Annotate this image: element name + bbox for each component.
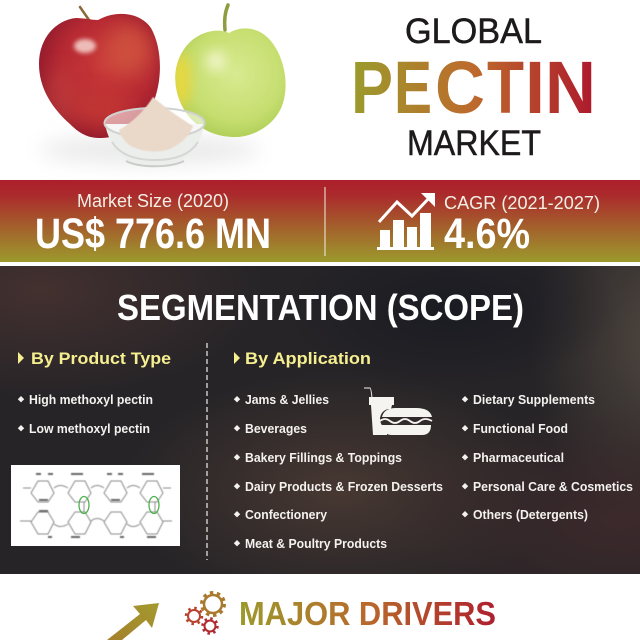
market size value: US$ 776.6 MN xyxy=(35,210,271,258)
title line: PECTIN: C xyxy=(435,46,485,129)
glass bowl with powder xyxy=(104,97,204,166)
CAGR label: CAGR (2021-2027) xyxy=(444,193,600,213)
heading: major drivers: MAJOR DRIVERS xyxy=(239,595,496,632)
icon: drink and burger xyxy=(364,388,432,435)
application list, right xyxy=(462,393,633,522)
application list, right: Pharmaceutical xyxy=(473,451,564,465)
heading: segmentation: SEGMENTATION (SCOPE) xyxy=(117,287,524,328)
application list, left: Meat & Poultry Products xyxy=(245,537,387,551)
title xyxy=(351,12,596,163)
title line: MARKET: MARKET xyxy=(407,124,541,163)
title line: PECTIN: P xyxy=(351,46,393,129)
application list, left xyxy=(234,393,443,551)
band divider xyxy=(324,187,326,256)
CAGR value: 4.6% xyxy=(444,210,530,258)
title line: PECTIN: T xyxy=(487,46,524,129)
column: by application xyxy=(234,349,633,551)
title line: GLOBAL: GLOBAL xyxy=(405,12,542,51)
stats band xyxy=(0,180,640,262)
product type list: Low methoxyl pectin xyxy=(29,422,150,436)
market size label: Market Size (2020) xyxy=(77,191,229,211)
application list, right: Functional Food xyxy=(473,422,568,436)
title line: PECTIN: N xyxy=(545,46,596,129)
application list, right: Dietary Supplements xyxy=(473,393,595,407)
title line: PECTIN: I xyxy=(525,46,545,129)
subheading: by application: By Application xyxy=(245,349,371,368)
dashed divider xyxy=(206,343,208,560)
application list, left: Confectionery xyxy=(245,508,327,522)
application list, right: Others (Detergents) xyxy=(473,508,588,522)
icon: gears xyxy=(186,592,224,634)
product type list: High methoxyl pectin xyxy=(29,393,153,407)
arrow: upward xyxy=(107,603,159,640)
icon: growth chart with arrow xyxy=(377,193,435,250)
application list, left: Jams & Jellies xyxy=(245,393,329,407)
application list, right: Personal Care & Cosmetics xyxy=(473,480,633,494)
application list, left: Bakery Fillings & Toppings xyxy=(245,451,402,465)
title line: PECTIN xyxy=(351,46,596,129)
green apple xyxy=(171,5,286,137)
product type list xyxy=(18,393,153,436)
application list, left: Dairy Products & Frozen Desserts xyxy=(245,480,443,494)
application list, left: Beverages xyxy=(245,422,307,436)
diagram: pectin molecule xyxy=(11,465,180,546)
subheading: by product type: By Product Type xyxy=(31,349,171,368)
photo: apples and pectin powder xyxy=(39,5,286,166)
column: by product type xyxy=(11,349,180,546)
panel: segmentation xyxy=(0,266,640,574)
title line: PECTIN: E xyxy=(394,46,432,129)
red apple xyxy=(39,7,160,138)
